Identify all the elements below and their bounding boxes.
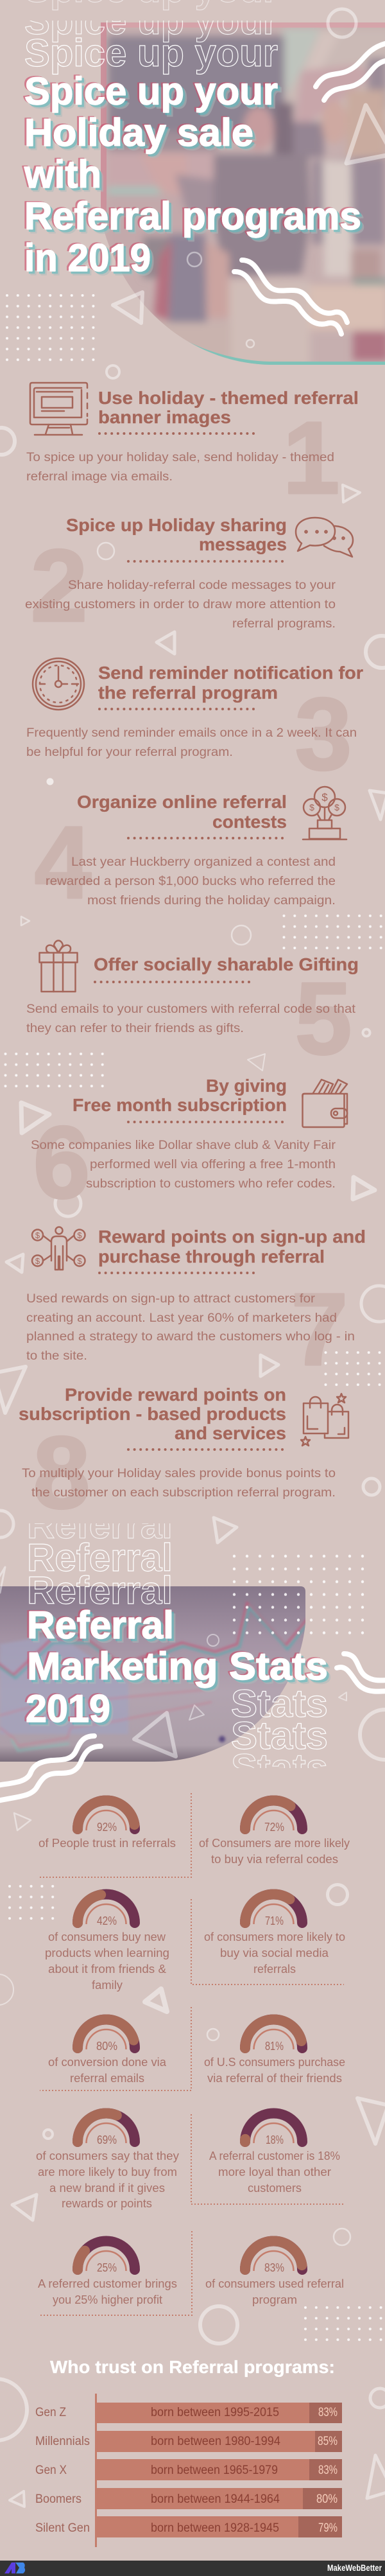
heading: Free month subscription bbox=[73, 1095, 287, 1115]
bar: Gen X: 83% bbox=[318, 2464, 338, 2477]
chart heading: Who trust on Referral programs: bbox=[50, 2357, 335, 2377]
caption: a new brand if it gives bbox=[49, 2182, 165, 2195]
body text: Share holiday-referral code messages to your bbox=[68, 579, 336, 592]
caption: of consumers buy new bbox=[48, 1931, 166, 1943]
outlined repeated words: Stats bbox=[231, 1682, 328, 1725]
bar: Boomers: Boomers bbox=[35, 2493, 81, 2506]
bar: Silent Gen: Silent Gen bbox=[35, 2521, 90, 2535]
icon labels: dollar signs bbox=[309, 791, 339, 812]
body text bbox=[26, 451, 334, 484]
gauge bbox=[78, 2241, 135, 2271]
bar: Silent Gen bbox=[35, 2516, 342, 2537]
caption: family bbox=[92, 1979, 123, 1992]
heading: Provide reward points on bbox=[65, 1385, 286, 1405]
gauge bbox=[78, 2114, 135, 2143]
dotted divider bbox=[128, 837, 287, 839]
icon: clock bbox=[33, 658, 84, 710]
value: 42% bbox=[97, 1914, 117, 1927]
main title: in 2019 bbox=[24, 236, 151, 279]
tip 3: reminder notification bbox=[26, 658, 363, 791]
caption bbox=[204, 2056, 345, 2085]
gauge bbox=[245, 1895, 302, 1924]
body text bbox=[26, 1003, 356, 1035]
body text: creating an account. Last year 60% of marketers had bbox=[26, 1311, 337, 1325]
main title: Referral programs bbox=[24, 195, 361, 238]
icon: wallet bbox=[303, 1080, 347, 1127]
tip 4: online contests bbox=[35, 787, 346, 920]
dotted divider bbox=[128, 1121, 287, 1123]
bar: Millennials: born between 1980-1994 bbox=[151, 2435, 280, 2448]
body text: Last year Huckberry organized a contest and bbox=[71, 855, 336, 869]
bar: Gen Z: born between 1995-2015 bbox=[151, 2406, 279, 2419]
bar: Gen Z bbox=[35, 2403, 342, 2423]
decorative squiggle right bbox=[337, 1654, 385, 1692]
footer bbox=[0, 2561, 385, 2576]
heading bbox=[98, 663, 363, 703]
icon labels: dollar signs: $ bbox=[35, 1256, 40, 1266]
bar: Boomers: 80% bbox=[316, 2493, 338, 2506]
outlined repeated title bbox=[24, 0, 278, 74]
stat: 25% bbox=[38, 2241, 177, 2306]
outlined repeated words: Stats bbox=[231, 1714, 328, 1757]
dotted divider bbox=[99, 432, 258, 435]
heading: Offer socially sharable Gifting bbox=[94, 954, 359, 974]
value: 25% bbox=[97, 2261, 117, 2274]
dotted divider bbox=[128, 560, 287, 563]
value: 72% bbox=[264, 1821, 284, 1834]
main title: with bbox=[24, 153, 101, 196]
outlined repeated words: Referral bbox=[27, 1503, 173, 1546]
body text: Send emails to your customers with referral code so that bbox=[26, 1003, 356, 1016]
tip 5: sharable gifting bbox=[26, 940, 359, 1076]
caption: customers bbox=[248, 2182, 302, 2195]
body text bbox=[26, 726, 357, 759]
decorative shapes bbox=[0, 1518, 385, 1760]
bar: Millennials: 85% bbox=[318, 2435, 338, 2448]
caption: are more likely to buy from bbox=[38, 2166, 177, 2178]
bar: Gen X bbox=[35, 2459, 342, 2480]
caption: to buy via referral codes bbox=[211, 1853, 338, 1866]
body text: To multiply your Holiday sales provide bonus points to bbox=[22, 1467, 336, 1480]
decorative squiggle bottom bbox=[234, 260, 347, 334]
big number 3: 3 bbox=[295, 676, 352, 791]
big number 6: 6 bbox=[33, 1105, 90, 1220]
caption bbox=[48, 2056, 167, 2085]
body text: to the site. bbox=[26, 1349, 87, 1363]
heading: Organize online referral bbox=[77, 792, 287, 812]
caption: of consumers more likely to bbox=[204, 1931, 345, 1943]
big number 2: 2 bbox=[31, 528, 87, 643]
body text: the customer on each subscription referral program. bbox=[31, 1486, 336, 1500]
body text: be helpful for your referral program. bbox=[26, 746, 233, 759]
heading: subscription - based products bbox=[19, 1404, 286, 1424]
caption: via referral of their friends bbox=[207, 2072, 342, 2085]
heading: the referral program bbox=[98, 683, 278, 703]
body text bbox=[31, 1139, 336, 1191]
icon labels: dollar signs: $ bbox=[35, 1231, 40, 1240]
body text: performed well via offering a free 1-month bbox=[90, 1158, 336, 1171]
caption bbox=[38, 2277, 177, 2306]
icon: shopping bags bbox=[301, 1394, 348, 1446]
bar: Gen X: born between 1965-1979 bbox=[151, 2464, 278, 2477]
stats title: Referral bbox=[27, 1604, 174, 1647]
main title: Holiday sale bbox=[24, 111, 253, 154]
icon labels: dollar signs: $ bbox=[309, 802, 314, 812]
caption: A referral customer is 18% bbox=[209, 2150, 340, 2162]
heading: Send reminder notification for bbox=[98, 663, 363, 683]
outlined repeated words bbox=[29, 1523, 327, 1768]
bar: Millennials bbox=[35, 2431, 342, 2452]
dotted divider bbox=[128, 1448, 287, 1451]
value: 80% bbox=[96, 2040, 117, 2053]
icon: monitor bbox=[30, 383, 87, 435]
caption: of Consumers are more likely bbox=[199, 1837, 350, 1850]
decorative squiggle top right bbox=[316, 44, 385, 100]
heading bbox=[98, 388, 359, 427]
big number 7: 7 bbox=[291, 1272, 348, 1387]
caption: products when learning bbox=[45, 1947, 169, 1959]
big number 8: 8 bbox=[33, 1415, 90, 1530]
value: 18% bbox=[266, 2134, 284, 2146]
main title bbox=[24, 69, 361, 279]
caption bbox=[199, 1837, 350, 1866]
heading bbox=[66, 515, 287, 554]
decorative triangle right bbox=[346, 105, 385, 163]
heading: banner images bbox=[98, 407, 231, 427]
body text: subscription to customers who refer codes. bbox=[86, 1177, 336, 1191]
icon labels: dollar signs: $ bbox=[77, 1231, 82, 1240]
stat: 80% bbox=[48, 2020, 167, 2085]
body text: To spice up your holiday sale, send holiday - themed bbox=[26, 451, 334, 464]
caption: A referred customer brings bbox=[38, 2277, 177, 2290]
caption: of People trust in referrals bbox=[38, 1837, 176, 1850]
stats title bbox=[26, 1604, 328, 1730]
heading bbox=[98, 1227, 366, 1266]
decorative shapes around tips bbox=[0, 365, 385, 1538]
heading: By giving bbox=[206, 1076, 287, 1096]
stat: 18% bbox=[209, 2114, 340, 2195]
icon: chat bubbles bbox=[296, 518, 353, 557]
stat: 81% bbox=[204, 2020, 345, 2085]
body text: Some companies like Dollar shave club & Vanity Fair bbox=[31, 1139, 336, 1152]
heading: Reward points on sign-up and bbox=[98, 1227, 366, 1247]
stat: 69% bbox=[36, 2114, 179, 2210]
gauge bbox=[245, 1801, 302, 1830]
body text: rewarded a person $1,000 bucks who referred the bbox=[46, 875, 336, 888]
body text: planned a strategy to award the customers who log - in bbox=[26, 1330, 355, 1344]
value: 71% bbox=[265, 1914, 284, 1927]
gauge bbox=[78, 2020, 135, 2049]
decorative ring top right bbox=[328, 9, 356, 37]
stat: 83% bbox=[205, 2241, 344, 2306]
tip 7: reward points bbox=[26, 1227, 366, 1387]
heading: messages bbox=[199, 534, 287, 554]
heading: Spice up Holiday sharing bbox=[66, 515, 287, 535]
gauge bbox=[245, 2020, 302, 2049]
decorative triangle lower left bbox=[113, 292, 142, 323]
stat: 71% bbox=[204, 1895, 345, 1976]
bar: Gen X: Gen X bbox=[35, 2464, 67, 2477]
heading: purchase through referral bbox=[98, 1247, 325, 1266]
value: 92% bbox=[97, 1821, 117, 1834]
bar: Boomers bbox=[35, 2488, 342, 2509]
big number 1: 1 bbox=[283, 400, 339, 515]
value: 81% bbox=[265, 2040, 284, 2053]
icon: gift box bbox=[40, 940, 77, 992]
body text: referral programs. bbox=[232, 617, 336, 631]
body text bbox=[25, 579, 336, 631]
body text bbox=[22, 1467, 336, 1500]
caption: program bbox=[252, 2293, 297, 2306]
caption: more loyal than other bbox=[218, 2166, 331, 2178]
outlined repeated words: Referral bbox=[27, 1536, 173, 1579]
heading: and services bbox=[175, 1423, 286, 1443]
icon labels: dollar signs: $ bbox=[334, 802, 339, 812]
body text: most friends during the holiday campaign. bbox=[87, 894, 336, 907]
outlined repeated words: Stats bbox=[231, 1746, 328, 1789]
icon labels: dollar signs bbox=[35, 1231, 82, 1266]
background dot grid bbox=[5, 294, 103, 361]
dotted divider bbox=[95, 981, 253, 983]
tip 6: free month subscription bbox=[31, 1076, 347, 1220]
hero section bbox=[5, 0, 385, 366]
icon labels: dollar signs: $ bbox=[321, 791, 328, 803]
stat: 92% bbox=[38, 1801, 176, 1850]
stats hero section bbox=[0, 1503, 385, 1801]
caption: you 25% higher profit bbox=[53, 2293, 162, 2306]
bar: Gen Z: Gen Z bbox=[35, 2406, 66, 2419]
decorative squiggle left bbox=[0, 1736, 101, 1801]
tip 8: subscription reward points bbox=[19, 1385, 348, 1530]
caption: of consumers say that they bbox=[36, 2150, 179, 2162]
tip 2: sharing messages bbox=[25, 515, 353, 643]
gauge bbox=[78, 1895, 135, 1924]
body text bbox=[26, 1292, 355, 1363]
body text: Used rewards on sign-up to attract customers for bbox=[26, 1292, 316, 1306]
body text: they can refer to their friends as gifts. bbox=[26, 1022, 244, 1035]
caption: about it from friends & bbox=[48, 1963, 166, 1976]
icon: trophy with coins bbox=[303, 787, 346, 839]
bar: Gen Z: 83% bbox=[318, 2406, 338, 2419]
gauge bbox=[245, 2114, 302, 2143]
body text: Frequently send reminder emails once in a 2 week. It can bbox=[26, 726, 357, 740]
bar: Silent Gen: 79% bbox=[318, 2521, 338, 2535]
heading bbox=[77, 792, 287, 832]
body text: referral image via emails. bbox=[26, 470, 173, 484]
caption bbox=[204, 1931, 345, 1976]
caption: referrals bbox=[253, 1963, 296, 1976]
body text: existing customers in order to draw more attention to bbox=[25, 598, 336, 611]
bar: Silent Gen: born between 1928-1945 bbox=[151, 2521, 279, 2535]
decorative ring bottom bbox=[246, 340, 254, 347]
outlined repeated words: Referral bbox=[27, 1569, 173, 1612]
caption: of conversion done via bbox=[48, 2056, 167, 2069]
bar: Millennials: Millennials bbox=[35, 2435, 90, 2448]
axis bbox=[95, 2394, 97, 2547]
caption bbox=[45, 1931, 169, 1992]
icon labels: dollar signs: $ bbox=[77, 1256, 82, 1266]
stats grid dotted dividers bbox=[40, 1793, 344, 2315]
heading bbox=[19, 1385, 286, 1443]
stats title: Marketing Stats bbox=[27, 1645, 328, 1688]
main title: Spice up your bbox=[24, 69, 278, 113]
body text bbox=[46, 855, 336, 907]
icon: logo bbox=[4, 2563, 25, 2573]
stat: 72% bbox=[199, 1801, 350, 1866]
big number 5: 5 bbox=[295, 961, 352, 1076]
tip 1: holiday banner images bbox=[26, 383, 359, 515]
stat: 42% bbox=[45, 1895, 169, 1992]
dotted divider bbox=[99, 1272, 258, 1274]
caption bbox=[209, 2150, 340, 2195]
icon: person with coins bbox=[32, 1227, 85, 1270]
stats photo: line chart bbox=[0, 1586, 308, 1763]
decorative shapes around bar chart bbox=[0, 2379, 385, 2507]
heading: contests bbox=[212, 812, 287, 832]
value: 83% bbox=[264, 2261, 284, 2274]
footer bar bbox=[0, 2561, 385, 2576]
gauge bbox=[245, 2241, 302, 2271]
heading: Use holiday - themed referral bbox=[98, 388, 359, 408]
heading bbox=[73, 1076, 287, 1115]
caption: rewards or points bbox=[62, 2197, 152, 2210]
caption bbox=[205, 2277, 344, 2306]
caption: referral emails bbox=[70, 2072, 144, 2085]
hero photo: shoppers bbox=[96, 19, 385, 366]
value: 69% bbox=[97, 2134, 117, 2146]
caption: of consumers used referral bbox=[205, 2277, 344, 2290]
caption: buy via social media bbox=[220, 1947, 329, 1959]
caption bbox=[36, 2150, 179, 2210]
stats title: 2019 bbox=[26, 1687, 110, 1730]
decorative ring small bbox=[187, 252, 201, 267]
big number 4: 4 bbox=[35, 805, 92, 920]
dotted divider bbox=[99, 708, 258, 710]
gauge bbox=[78, 1801, 135, 1830]
caption: of U.S consumers purchase bbox=[204, 2056, 345, 2069]
bar: Boomers: born between 1944-1964 bbox=[151, 2493, 280, 2506]
bar chart: who trusts referral programs bbox=[35, 2394, 342, 2547]
outlined repeated title: Spice up your bbox=[24, 0, 278, 42]
decorative shapes around stats bbox=[0, 1813, 385, 2348]
stats dot grid bbox=[232, 1554, 364, 1636]
outlined repeated title: Spice up your bbox=[24, 31, 278, 74]
